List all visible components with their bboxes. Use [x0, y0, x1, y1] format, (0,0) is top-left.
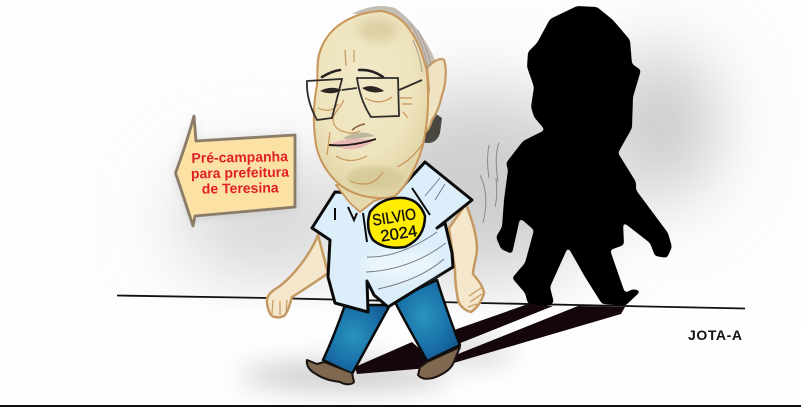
glasses — [307, 78, 422, 120]
arrow sign — [175, 115, 295, 226]
badge — [368, 198, 425, 248]
eyes — [320, 86, 384, 93]
arrow text: para prefeitura — [191, 164, 289, 181]
face — [314, 11, 428, 198]
right hand fingers — [468, 288, 482, 307]
motion lines — [480, 143, 499, 223]
character — [267, 6, 484, 384]
hair — [316, 6, 436, 78]
bottom border — [0, 405, 801, 407]
shirt placket and collar lines — [335, 188, 430, 242]
wrinkles and nose — [318, 50, 423, 184]
shirt folds — [366, 178, 446, 289]
ground line — [117, 296, 745, 308]
hair strands — [409, 22, 431, 72]
chin shading — [347, 166, 403, 190]
shoes — [307, 347, 460, 384]
arrow text: Pré-campanha — [191, 148, 288, 166]
arrow text: de Teresina — [202, 179, 279, 197]
cast shadows on ground — [355, 304, 625, 374]
signature: JOTA-A — [688, 327, 742, 343]
badge text — [371, 206, 420, 246]
left arm — [267, 235, 328, 317]
badge text: 2024 — [379, 223, 419, 246]
dark hair behind ear — [422, 114, 442, 143]
shirt highlights — [362, 251, 438, 279]
badge text: SILVIO — [371, 206, 417, 230]
moustache shadow — [343, 132, 375, 140]
left hand fingers — [272, 300, 287, 315]
neck — [336, 175, 410, 212]
mouth — [329, 139, 376, 149]
shirt — [312, 162, 472, 312]
forehead shading — [358, 18, 398, 42]
arrow text — [191, 148, 290, 197]
ear — [423, 59, 446, 133]
eyebrows — [322, 70, 383, 77]
nostril — [352, 124, 365, 130]
silhouette shadow figure — [496, 6, 672, 306]
right arm — [449, 204, 484, 312]
trousers — [323, 280, 460, 374]
